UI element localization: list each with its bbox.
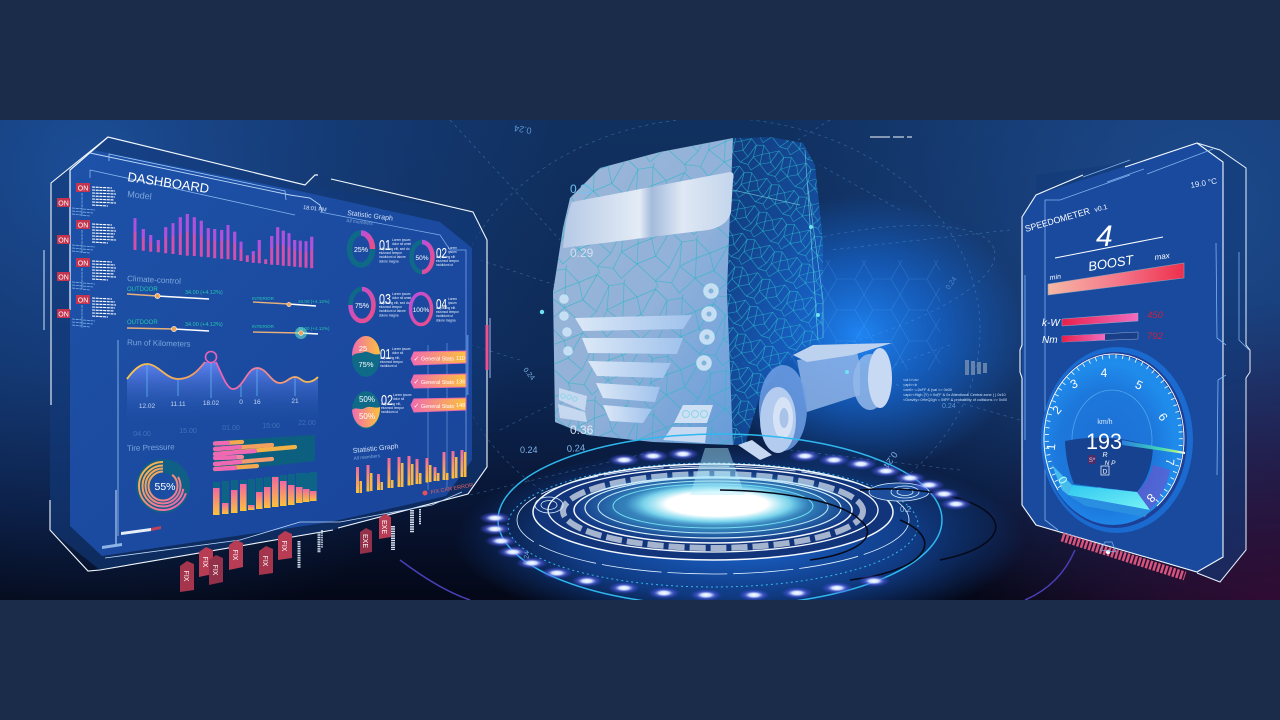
gear selector xyxy=(1088,455,1109,476)
mesh: cab front xyxy=(553,138,733,445)
tag 7 xyxy=(360,528,372,554)
scattered value labels: 0.24 xyxy=(523,551,531,565)
k-W meter: k-W xyxy=(1042,318,1061,329)
hatch strip xyxy=(1062,537,1185,576)
needle xyxy=(1122,440,1185,454)
truck value labels xyxy=(570,182,594,437)
min label: min xyxy=(1049,273,1062,282)
core glow xyxy=(625,482,809,526)
gear selector: S* xyxy=(1089,458,1096,464)
donut descriptions: adipiscing elit, xyxy=(381,402,401,406)
donut labels: 04 xyxy=(436,296,447,313)
pill 1: 110 xyxy=(456,356,465,362)
panel frame xyxy=(44,137,490,571)
donut descriptions: incididunt ut xyxy=(380,364,397,368)
chart: tire pressure donut xyxy=(136,459,190,513)
chart: statistic graph bars xyxy=(356,450,466,493)
connector node xyxy=(1100,542,1116,554)
donut descriptions: eiusmod tempor xyxy=(381,406,405,410)
gauge bright panel xyxy=(1068,485,1150,510)
gauge numbers: 6 xyxy=(1155,410,1171,424)
mesh: cab side xyxy=(727,137,823,445)
sliders: INTERIOR xyxy=(252,324,275,329)
heading: statistic graph bottom: All members xyxy=(353,453,381,462)
donut descriptions: eiusmod tempor xyxy=(379,251,403,255)
donut descriptions: ipsum xyxy=(448,301,457,305)
tag 5 xyxy=(259,546,273,575)
heading: statistic graph bottom: Statistic Graph xyxy=(352,443,399,455)
tag 6: FIX xyxy=(280,541,287,552)
headlight rings xyxy=(560,284,718,370)
donut 50 percent: 50% xyxy=(415,255,429,262)
chart: run of kilometers: 15:00 xyxy=(262,423,280,430)
donut descriptions: dolor sit amet xyxy=(392,242,411,246)
sliders: OUTDOOR xyxy=(127,287,158,293)
chart: run of kilometers: 21 xyxy=(291,398,299,405)
donut descriptions: eiusmod tempor xyxy=(436,310,460,314)
donut descriptions: adipiscing elit, xyxy=(380,356,400,360)
scattered value labels: 0.2 xyxy=(900,505,912,514)
chart: run of kilometers: 0 xyxy=(239,399,243,406)
heading: dashboard: DASHBOARD xyxy=(127,169,210,196)
panel body xyxy=(50,137,487,570)
gauge numbers: 8 xyxy=(1143,491,1158,506)
segment blocks xyxy=(548,468,878,552)
Nm meter xyxy=(1042,331,1164,346)
chart: tire pressure donut: 55% xyxy=(154,481,176,493)
gauge numbers: 3 xyxy=(1068,376,1080,392)
truck xyxy=(540,137,892,460)
sliders: 34.00 (+4.12%) xyxy=(185,290,223,296)
gauge numbers: 1 xyxy=(1044,443,1058,451)
donut descriptions: eiusmod tempor xyxy=(436,259,460,263)
heading: run of kilometers: Run of Kilometers xyxy=(127,338,191,349)
tag 1: FIX xyxy=(182,571,189,582)
beam xyxy=(690,448,745,495)
pie 25/75: 25 xyxy=(359,344,367,353)
truck value labels: 0.21 xyxy=(570,182,594,196)
code snippet: <ul.l><a> xyxy=(903,378,920,382)
top band xyxy=(0,0,1280,121)
k-W meter: 450 xyxy=(1147,310,1164,321)
bottom band xyxy=(0,600,1280,720)
donut descriptions: Lorem xyxy=(448,297,457,301)
donut descriptions: dolore magna xyxy=(436,318,456,322)
pill 3 xyxy=(411,398,466,412)
donut descriptions: incididunt ut labore xyxy=(379,255,406,259)
donut descriptions: incididunt ut labore xyxy=(379,309,406,313)
scattered value labels: 0.24 xyxy=(521,367,536,382)
donut descriptions: ipsum xyxy=(448,250,457,254)
inner rings xyxy=(585,478,841,538)
panel: dashboard xyxy=(44,137,490,571)
sliders: OUTDOOR xyxy=(127,320,158,326)
pill 2 xyxy=(411,374,466,388)
gauge bowl xyxy=(1065,438,1153,492)
ON indicators: ON xyxy=(78,186,88,192)
heading: tire pressure: Tire Pressure xyxy=(127,442,175,453)
cab side xyxy=(727,137,823,445)
donut labels: 01 xyxy=(379,237,391,254)
frame details xyxy=(1025,149,1249,530)
panel: speedometer xyxy=(1020,143,1250,582)
fender and body xyxy=(738,343,892,460)
donut descriptions: dolor sit xyxy=(393,397,404,401)
tag 8: EXE xyxy=(380,520,387,534)
chart: vertical bars xyxy=(213,472,317,515)
tag 3: FIX xyxy=(211,565,218,576)
chart: run of kilometers: 04.00 xyxy=(133,431,151,438)
donut descriptions: dolore magna xyxy=(379,313,399,317)
ON indicators: ON xyxy=(58,312,69,318)
Nm meter: Nm xyxy=(1042,335,1058,346)
ON indicators: ON xyxy=(58,274,69,282)
code snippet: <api><High (Y) = 0xFF & 0x Attentional Central zone ( ) 0x10 xyxy=(903,393,1006,397)
chart: run of kilometers: 18.02 xyxy=(203,400,220,407)
gauge numbers: 0 xyxy=(1055,473,1071,486)
donut labels: 03 xyxy=(379,291,391,308)
ON indicators: ON xyxy=(58,238,69,244)
pill 2: ✓ xyxy=(414,379,419,386)
tag 4: FIX xyxy=(231,550,238,561)
donut descriptions: incididunt ut xyxy=(381,410,398,414)
donut descriptions: dolor sit xyxy=(392,351,403,355)
sliders: 34.00 (+4.12%) xyxy=(185,322,223,328)
pie 25/75 xyxy=(352,336,380,377)
scattered value labels: 0.24 xyxy=(942,403,956,410)
timestamp: 18:01 PM xyxy=(303,205,327,213)
chart: run of kilometers: 12.02 xyxy=(139,403,156,410)
light dots xyxy=(479,448,972,601)
pill 1: General Stats xyxy=(421,356,454,362)
pill 1: ✓ xyxy=(414,356,419,363)
heading: statistic graph bottom xyxy=(353,444,398,460)
ON indicators: ON xyxy=(78,298,88,304)
heading: climate control: Climate-control xyxy=(127,274,181,286)
grille slats xyxy=(575,315,692,423)
low range glow xyxy=(1052,465,1072,495)
donut 75 percent: 75% xyxy=(355,303,369,310)
data columns near tags xyxy=(299,509,420,568)
divider xyxy=(1055,237,1163,258)
donut descriptions: adipiscing elit xyxy=(436,306,455,310)
gauge inner ring xyxy=(1072,390,1152,490)
donut descriptions: incididunt ut xyxy=(436,263,453,267)
donut descriptions xyxy=(379,238,460,414)
donut 25 percent xyxy=(350,233,372,265)
donut 75 percent xyxy=(350,289,374,321)
tag 1 xyxy=(180,561,194,592)
scattered value labels: 0.24 xyxy=(566,443,586,455)
ON indicators: ON xyxy=(78,260,88,268)
tag 4 xyxy=(229,540,243,570)
chart: run of kilometers: 15.00 xyxy=(179,428,197,435)
pie 50/50 xyxy=(352,391,380,429)
donut 50 percent xyxy=(412,242,432,272)
hologram platform xyxy=(479,434,996,606)
connecting curve xyxy=(400,550,1075,600)
gear selector: D xyxy=(1103,468,1108,476)
bottom status chips xyxy=(102,526,161,549)
tag 2 xyxy=(199,547,213,577)
black arcs xyxy=(720,489,996,580)
gauge numbers: 2 xyxy=(1049,403,1065,417)
code snippet: <api><b xyxy=(903,383,917,387)
donut descriptions: dolore magna xyxy=(379,259,399,263)
gauge numbers: 4 xyxy=(1101,366,1108,380)
heading: statistic graph top: Statistic Graph xyxy=(347,210,393,223)
lower lights xyxy=(558,388,713,443)
side edge xyxy=(733,150,823,340)
top dashes xyxy=(870,136,912,138)
pill 1 xyxy=(411,351,466,365)
scattered value labels: 0.24 xyxy=(520,445,538,455)
donut labels: 02 xyxy=(381,392,393,409)
max label: max xyxy=(1154,251,1171,262)
donut labels xyxy=(379,237,447,409)
windshield xyxy=(563,172,734,248)
tags: FIX and EXE xyxy=(180,514,391,592)
gear number: 4 xyxy=(1096,220,1113,253)
speed readout: N P xyxy=(1105,460,1116,467)
main illustration xyxy=(0,118,1280,635)
tick ring xyxy=(1044,354,1184,506)
red range xyxy=(1137,465,1170,510)
outer rings xyxy=(498,434,942,606)
boost bar xyxy=(1048,263,1184,295)
pill 3: 148 xyxy=(456,403,465,409)
chart: run of kilometers: 01.00 xyxy=(222,425,240,432)
heading: model: Model xyxy=(127,189,152,202)
speed readout: km/h xyxy=(1097,419,1113,426)
stats pills xyxy=(411,351,466,412)
scattered value labels: 0.24 xyxy=(513,123,532,136)
gauge xyxy=(1041,347,1193,533)
ON descriptions xyxy=(92,187,116,317)
donut descriptions: Lorem xyxy=(448,246,457,250)
donut stats xyxy=(350,233,460,414)
tag 6 xyxy=(278,531,292,560)
donut descriptions: Lorem ipsum xyxy=(392,238,410,242)
truck value labels: 0.36 xyxy=(570,423,594,437)
code snippet xyxy=(903,378,1007,402)
heading: speedometer: SPEEDOMETER xyxy=(1024,206,1091,234)
pill 2: General Stats xyxy=(421,380,454,386)
tag 7: EXE xyxy=(361,534,368,548)
tag 2: FIX xyxy=(201,557,208,568)
code snippet: <xml> = 0xFF & (val >> 0x00 xyxy=(903,388,952,392)
scattered value labels xyxy=(513,123,959,565)
donut descriptions: eiusmod tempor xyxy=(379,305,403,309)
ON indicators xyxy=(57,183,90,318)
dashed orbit lines xyxy=(450,120,1020,496)
pie 50/50: 50% xyxy=(359,412,375,421)
grey blocks xyxy=(965,360,987,375)
pie 25/75: 75% xyxy=(358,360,374,369)
pill 2: 136 xyxy=(456,380,465,386)
donut labels: 01 xyxy=(380,346,391,363)
tag 5: FIX xyxy=(261,556,268,567)
error label: FIX CAR ERROR xyxy=(430,483,474,496)
donut 25 percent: 25% xyxy=(354,247,368,254)
front plate xyxy=(1022,143,1223,572)
gauge numbers: 7 xyxy=(1163,458,1177,466)
truck marker dots xyxy=(540,225,849,374)
chart: run of kilometers: 22.00 xyxy=(298,420,316,427)
donut labels: 02 xyxy=(436,245,447,262)
speed readout: 193 xyxy=(1086,429,1122,454)
core haze xyxy=(575,470,855,542)
scattered value labels: 0.24 xyxy=(881,450,900,470)
donut descriptions: adipiscing elit, sed do xyxy=(379,301,410,305)
chart: horizontal bars xyxy=(213,435,315,472)
tag 8 xyxy=(379,514,391,539)
Nm meter: 792 xyxy=(1147,331,1164,342)
ON indicators: ON xyxy=(78,222,88,230)
chart: run of kilometers: 11.11 xyxy=(170,401,186,408)
donut descriptions: dolor sit amet xyxy=(392,296,411,300)
temperature: 19.0 °C xyxy=(1190,176,1218,190)
donut descriptions: eiusmod tempor xyxy=(380,360,404,364)
donut descriptions: adipiscing elit, sed do xyxy=(379,247,410,251)
chart: model bars highlight xyxy=(135,214,312,255)
scattered value labels: 0.24 xyxy=(945,276,959,291)
side rings xyxy=(535,483,929,513)
donut descriptions: Lorem ipsum xyxy=(392,292,410,296)
speed readout: R xyxy=(1102,452,1108,459)
sliders: 34.00 (+4.12%) xyxy=(298,326,330,331)
pie 50/50: 50% xyxy=(359,395,375,404)
pill 3: ✓ xyxy=(414,403,419,410)
donut descriptions: incididunt ut xyxy=(436,314,453,318)
heading: statistic graph top: All members xyxy=(346,218,374,227)
chart: run of kilometers xyxy=(127,352,318,438)
donut descriptions: adipiscing elit xyxy=(436,255,455,259)
truck value labels: 0.29 xyxy=(570,246,594,260)
gauge numbers: 5 xyxy=(1133,377,1145,393)
donut descriptions: Lorem ipsum xyxy=(392,347,410,351)
background xyxy=(0,120,1280,635)
chart: run of kilometers: 16 xyxy=(253,399,261,406)
sliders xyxy=(127,287,330,339)
version: v0.1 xyxy=(1094,204,1108,214)
tag 3 xyxy=(209,555,223,585)
chart: model bars xyxy=(135,214,312,268)
sliders: 34.00 (+4.12%) xyxy=(298,299,330,304)
donut 100 percent: 100% xyxy=(413,307,430,314)
cab front xyxy=(553,138,733,445)
gauge numbers xyxy=(1044,366,1177,506)
boost label: BOOST xyxy=(1087,252,1135,274)
back plate xyxy=(1036,150,1246,582)
donut descriptions: Lorem ipsum xyxy=(393,393,411,397)
code snippet: <Gravity>.0HeQ2gh = 0xFF & probability of collisions >> 0x00 xyxy=(903,398,1007,402)
pill 3: General Stats xyxy=(421,404,454,410)
ON indicators: ON xyxy=(58,200,69,208)
k-W meter xyxy=(1042,310,1164,329)
donut 100 percent xyxy=(410,294,432,324)
speed readout xyxy=(1086,419,1122,467)
sliders: INTERIOR xyxy=(252,296,275,301)
